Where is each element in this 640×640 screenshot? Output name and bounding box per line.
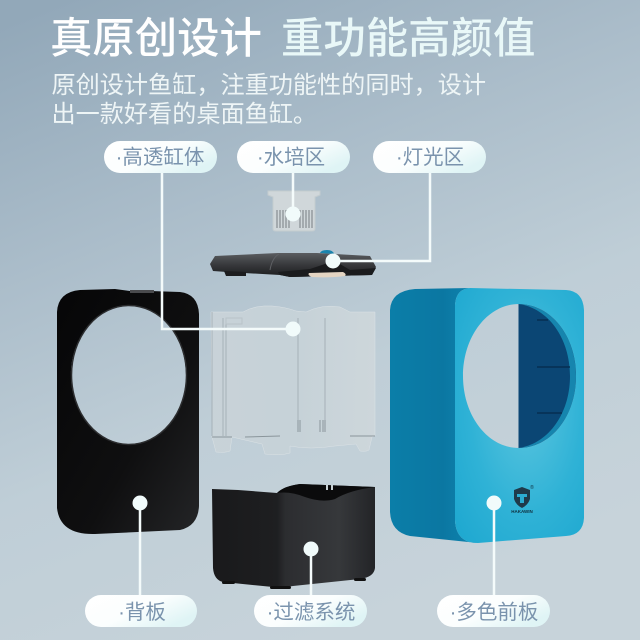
part: lamp lid <box>210 250 376 277</box>
part: cultivation cup <box>268 191 320 231</box>
description text: 出一款好看的桌面鱼缸。 <box>52 101 317 128</box>
label: 灯光区 <box>373 141 486 173</box>
leader lines <box>140 172 494 595</box>
front of blue panel <box>455 288 584 543</box>
description text <box>52 72 486 128</box>
label: 多色前板: ·多色前板 <box>450 601 538 624</box>
label: 背板: ·背板 <box>118 601 166 624</box>
label: 水培区 <box>237 141 350 173</box>
label: 多色前板 <box>437 595 550 627</box>
label: 高透缸体: ·高透缸体 <box>116 146 204 169</box>
part: back panel <box>57 289 199 534</box>
logo <box>511 484 534 514</box>
part: blue front panel <box>390 288 584 543</box>
part: transparent tank <box>211 306 375 455</box>
side of blue panel <box>390 288 478 543</box>
label: 过滤系统 <box>254 595 367 627</box>
label: 高透缸体 <box>104 141 217 173</box>
title second part: 重功能高颜值 <box>281 15 535 62</box>
marker dots <box>132 206 502 556</box>
label: 灯光区: ·灯光区 <box>396 146 464 169</box>
part: filter box <box>212 484 375 589</box>
title: 真原创设计 <box>50 15 262 62</box>
logo: HAKAWIN <box>511 509 533 514</box>
inner wall of hole <box>518 304 576 448</box>
label: 背板 <box>85 595 197 627</box>
label: 过滤系统: ·过滤系统 <box>267 601 355 624</box>
description text: 原创设计鱼缸，注重功能性的同时，设计 <box>52 72 486 99</box>
label: 水培区: ·水培区 <box>257 146 325 169</box>
logo: ® <box>530 484 534 491</box>
